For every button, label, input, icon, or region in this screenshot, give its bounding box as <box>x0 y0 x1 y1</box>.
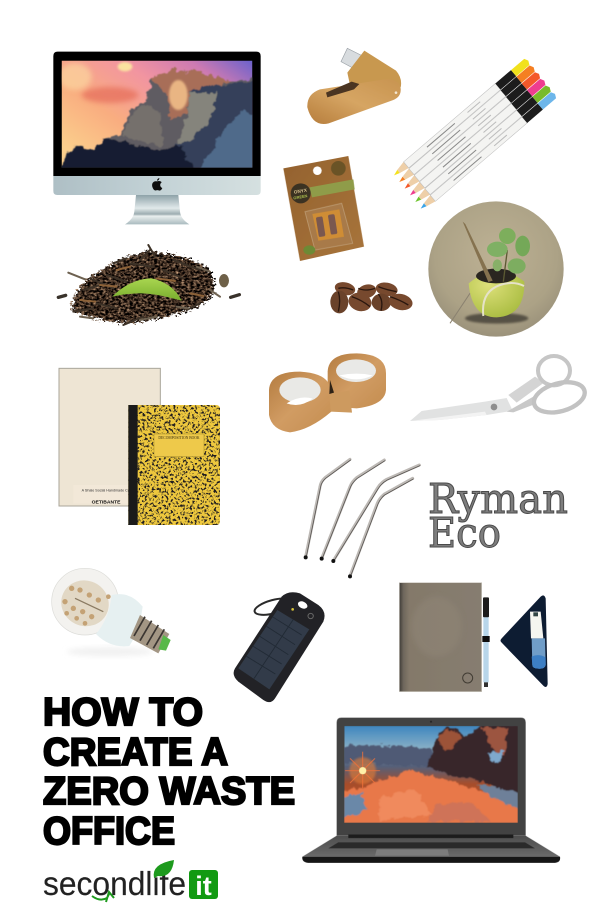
keyboard deck <box>302 836 560 857</box>
icon: erasable pen <box>482 597 490 687</box>
icon: coloured highlighter pencils <box>391 58 558 212</box>
title: HOW TO <box>43 691 203 734</box>
pencil 6 <box>418 91 558 212</box>
title: ZERO WASTE <box>43 770 295 813</box>
title: CREATE A <box>43 731 228 774</box>
title: OFFICE <box>43 810 175 853</box>
pencil 2 <box>397 64 536 185</box>
icon: pencil sharpener in kraft packaging: GREEN <box>293 193 308 201</box>
icon: yellow composition notebook: DECOMPOSITION BOOK <box>158 436 200 440</box>
pencil 3 <box>402 71 542 192</box>
leaf <box>154 860 174 878</box>
icon: iMac desktop computer <box>53 52 261 224</box>
logo: Ryman Eco: Ryman <box>428 475 568 523</box>
pencil 4 <box>407 78 547 198</box>
logo: secondlife it: it <box>195 871 212 901</box>
icon: LED light bulb <box>52 568 171 656</box>
icon: coffee beans <box>330 280 414 314</box>
icon: solar power bank <box>234 592 325 702</box>
icon: kraft paper notepad <box>59 368 160 506</box>
pencil 5 <box>413 84 552 205</box>
icon: pencil sharpener in kraft packaging <box>283 156 364 261</box>
logo: Ryman Eco: Eco <box>428 509 501 557</box>
logo: secondlife it: secondlife <box>43 865 186 902</box>
icon: pencil sharpener in kraft packaging: ONYX <box>293 187 308 195</box>
icon: yellow composition notebook <box>128 405 220 525</box>
icon: wooden swivel USB drive <box>307 48 401 124</box>
icon: plantable pencil in tennis ball, round photo <box>428 201 564 337</box>
icon: fabric scissors <box>410 356 588 421</box>
logo: Ryman Eco <box>428 475 568 557</box>
green leaf <box>112 278 182 301</box>
laptop screen <box>344 726 518 823</box>
icon: loose tea leaves pile <box>58 245 239 325</box>
icon: kraft paper notepad: OETIBANTE <box>92 499 121 505</box>
recycling arrow <box>92 892 114 902</box>
icon: metal drinking straws <box>304 459 420 578</box>
icon: kraft paper notepad: A Shale Social Handmade Company <box>82 488 141 492</box>
icon: microfibre cloth and spray bottle <box>500 595 548 687</box>
title <box>43 691 295 853</box>
it badge <box>189 870 218 899</box>
icon: reusable smart notebook <box>399 583 482 692</box>
icon: paper packing tape rolls <box>269 353 386 432</box>
icon: laptop <box>302 718 560 863</box>
apple logo <box>152 178 162 191</box>
pencil 1 <box>391 58 531 178</box>
monitor screen <box>62 60 252 168</box>
